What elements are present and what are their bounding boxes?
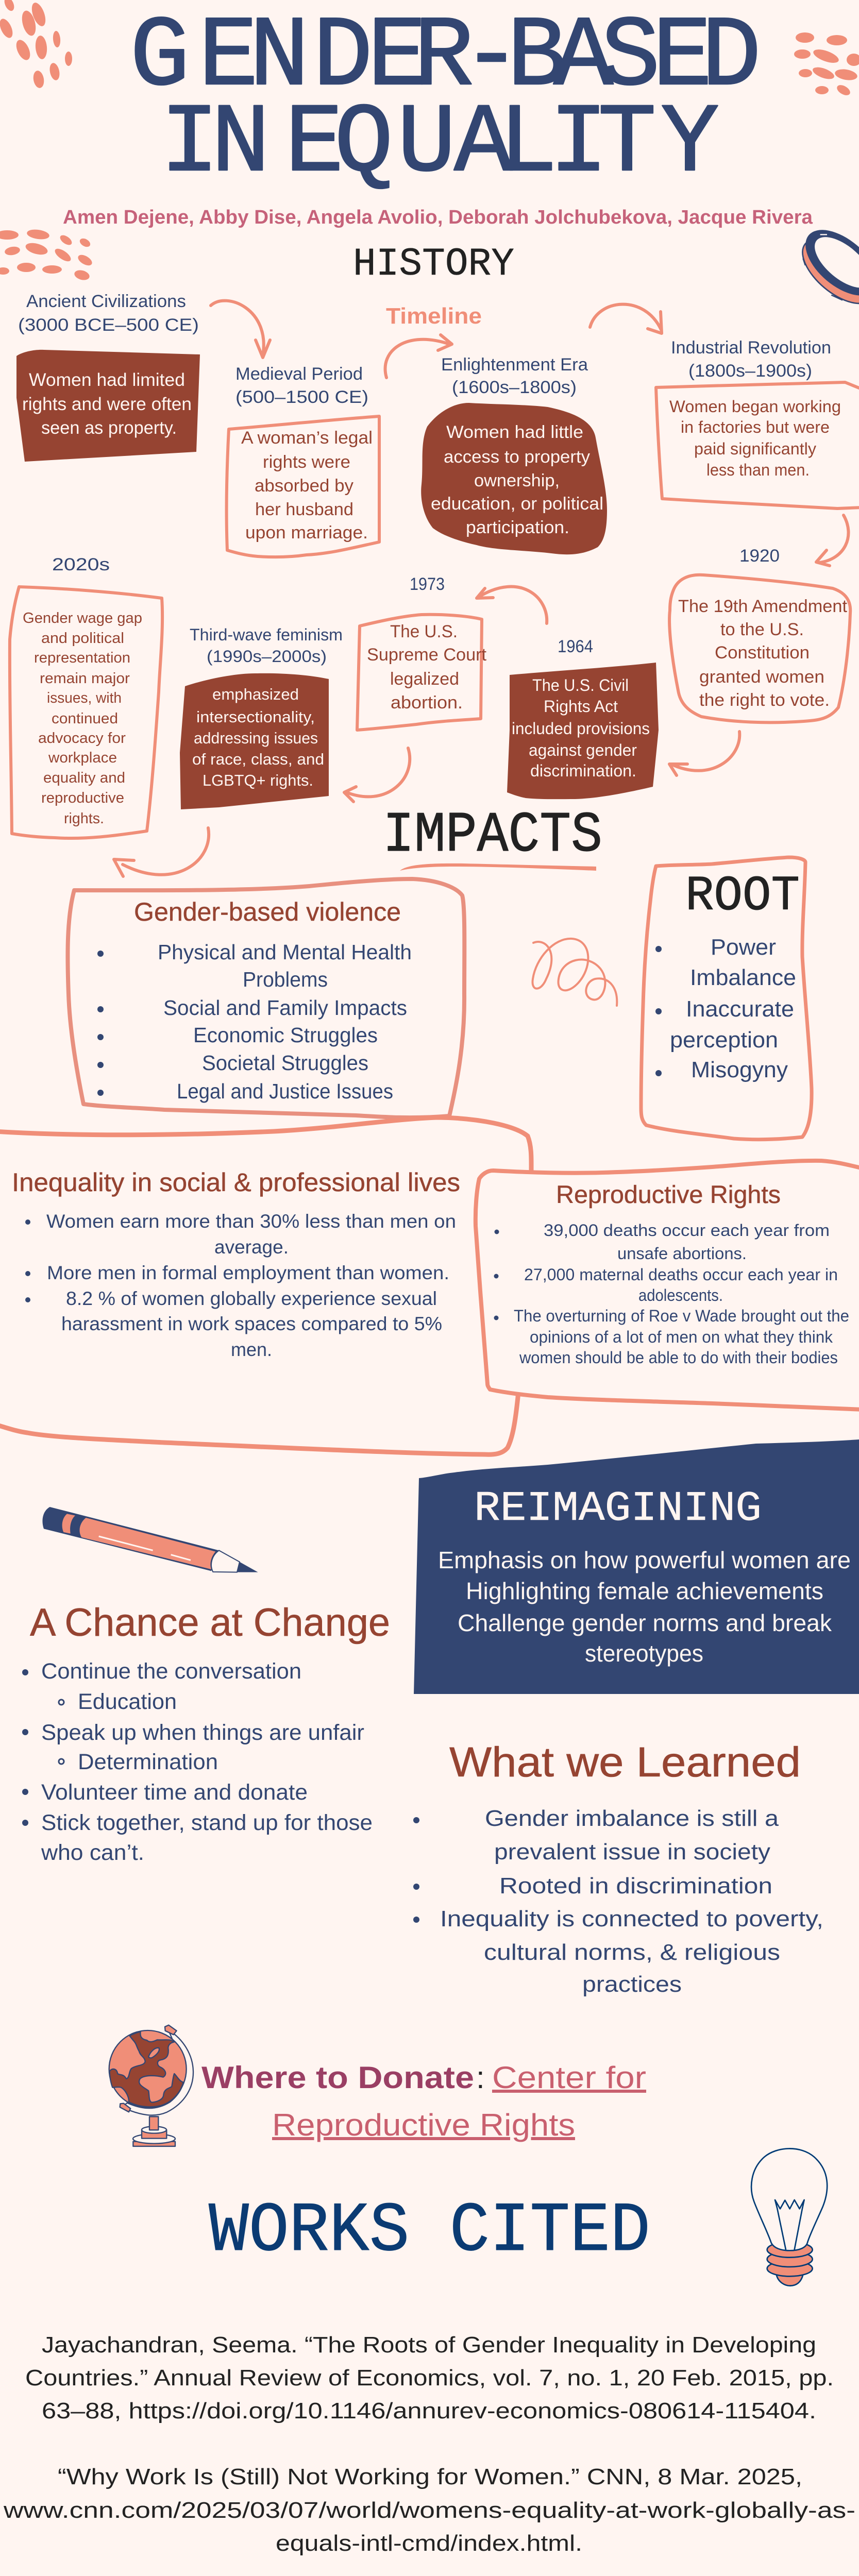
date label [441,355,588,397]
box text: included provisions [512,719,650,738]
bullet list: opinions of a lot of men on what they think [530,1328,833,1346]
box text [241,428,373,543]
box text: Women had little [446,422,583,442]
heading: impacts: IMPACTS [383,804,602,868]
decoration: mid left dabs [0,228,94,282]
box text: intersectionality, [196,708,315,726]
box text: Constitution [715,643,810,663]
bullet list: Education [78,1689,177,1714]
panel: a chance at change [22,1601,390,1865]
box text: emphasized [212,685,299,703]
donate callout: : [476,2060,485,2095]
panel: root [641,857,812,1140]
panel text: Highlighting female achievements [466,1578,823,1604]
bullet list: Misogyny [691,1057,788,1082]
box text: participation. [466,518,569,537]
arrow: 1973 to third-wave [344,748,410,802]
date label: 2020s [52,555,110,574]
panel: reimagining [414,1439,859,1694]
bullet list: Legal and Justice Issues [177,1079,393,1103]
box text: access to property [444,447,590,467]
bullet list: men. [231,1339,272,1360]
panel: what we learned [413,1739,823,1997]
bullet list: cultural norms, & religious [484,1940,780,1965]
box text: remain major [40,670,130,687]
timeline: 1920 [669,546,850,722]
decoration: squiggle [532,939,617,1006]
box text: Rights Act [544,697,618,716]
title [130,1,761,200]
outlined box [10,587,162,838]
date label: (1600s–1800s) [452,378,577,397]
panel heading: ROOT [685,868,800,924]
box text: seen as property. [41,418,177,438]
bullet list: who can’t. [41,1840,144,1865]
icon: pencil [42,1507,258,1572]
icon: ring [791,217,859,315]
works cited text: Countries.” Annual Review of Economics, vol. 7, no. 1, 20 Feb. 2015, pp. [25,2365,834,2391]
works cited text [3,2332,855,2556]
icon: light bulb [751,2148,827,2286]
bullet list: adolescents. [638,1286,723,1304]
outlined blob [669,575,850,722]
panel text: stereotypes [585,1640,703,1667]
box text: and political [41,630,124,647]
bullet list [413,1806,823,1997]
outlined box [227,416,379,557]
date label: Industrial Revolution [671,338,831,358]
donate callout: Center for [492,2060,646,2095]
date label: (1800s–1900s) [688,361,812,381]
bullet list: Continue the conversation [41,1659,301,1684]
box text: absorbed by [255,476,353,496]
box text: rights. [64,810,104,827]
bullet list: Determination [78,1750,218,1774]
bullet list: prevalent issue in society [494,1839,770,1865]
arrow: third-wave to 2020s [114,828,209,876]
box text: discrimination. [530,761,636,780]
outlined box [357,615,482,730]
timeline: medieval period [227,364,379,557]
bullet list: Power [711,935,776,960]
panel heading: A Chance at Change [30,1601,390,1645]
heading: works cited: WORKS CITED [209,2192,650,2271]
decoration: top right dabs [794,32,859,97]
box text: rights were [263,452,350,472]
box text: equality and [43,770,125,786]
box text: continued [52,710,118,727]
works cited text: equals-intl-cmd/index.html. [276,2531,582,2556]
timeline: enlightenment era [421,355,607,554]
bullet list: Volunteer time and donate [41,1780,308,1805]
box text: Women had limited [29,370,185,390]
box text [22,370,192,438]
date label: 1973 [410,574,445,594]
timeline: 1973 [357,574,487,730]
bullet list: Inequality is connected to poverty, [440,1906,823,1931]
box text: ownership, [474,471,560,490]
bullet list [97,940,412,1103]
date label: (1990s–2000s) [207,647,327,666]
panel text: Challenge gender norms and break [458,1609,832,1636]
timeline: third-wave feminism [180,625,343,809]
box text: of race, class, and [192,750,324,768]
works cited text: www.cnn.com/2025/03/07/world/womens-equality-at-work-globally-as- [3,2498,855,2523]
bullet list: harassment in work spaces compared to 5% [61,1313,442,1334]
bullet list: Problems [243,968,328,991]
bullet list: practices [582,1972,682,1997]
bullet list: 39,000 deaths occur each year from [544,1221,830,1240]
date label [671,338,831,381]
bullet list: Physical and Mental Health [158,940,412,964]
date label: Third-wave feminism [190,625,343,644]
box text: Women began working [669,397,841,416]
arrow: industrial to 1920 [816,515,848,566]
panel text [438,1547,851,1667]
heading: history: HISTORY [353,242,514,286]
box text: A woman’s legal [241,428,373,448]
bullet list: women should be able to do with their bodies [519,1348,838,1367]
bullet list: 8.2 % of women globally experience sexual [66,1288,437,1309]
box text [512,676,650,780]
box text [669,397,841,479]
bullet list [655,935,796,1082]
box text: paid significantly [694,439,816,458]
timeline: 1964 [507,637,659,799]
outlined box [656,382,859,509]
bullet list: average. [214,1236,289,1258]
bullet list: 27,000 maternal deaths occur each year in [524,1265,838,1284]
bullet list: perception [670,1027,778,1053]
bullet list: Speak up when things are unfair [41,1720,364,1745]
bullet list: Women earn more than 30% less than men on [46,1211,456,1232]
authors: Amen Dejene, Abby Dise, Angela Avolio, Deborah Jolchubekova, Jacque Rivera [63,207,813,228]
brown blob [421,403,607,554]
brown box [180,673,329,809]
date label [190,625,343,666]
date label: (500–1500 CE) [235,387,368,407]
decoration: top left dabs [0,0,72,89]
box text: granted women [699,667,824,687]
timeline: ancient civilizations [16,292,200,462]
panel heading: Reproductive Rights [556,1181,781,1209]
arrow: ancient to medieval [211,301,270,358]
box text: Gender wage gap [23,610,142,626]
timeline: industrial revolution [656,338,859,509]
donate callout: Reproductive Rights [272,2108,575,2142]
panel heading: REIMAGINING [474,1485,762,1533]
bullet list [25,1211,456,1360]
bullet list: Stick together, stand up for those [41,1810,373,1835]
date label: 1964 [558,637,593,656]
bullet list: Social and Family Impacts [163,996,407,1020]
arrow: enlightenment to industrial [590,304,662,333]
title: GENDER-BASED [130,1,761,114]
panel: gender-based violence [68,879,464,1117]
title: INEQUALITY [160,89,719,200]
box text: against gender [529,741,637,759]
donate callout [201,2060,646,2142]
box text [23,610,142,827]
bullet list: More men in formal employment than women. [47,1262,449,1283]
box text: issues, with [47,690,122,706]
panel heading: What we Learned [449,1739,801,1786]
date label: Enlightenment Era [441,355,588,375]
box text: The U.S. [390,622,458,641]
box text [678,597,848,710]
brown box [16,350,200,462]
panel: reproductive rights [476,1161,859,1410]
bullet list: Imbalance [690,965,796,990]
box text: rights and were often [22,394,192,414]
box text: legalized [390,669,459,689]
box text: less than men. [706,461,810,479]
box text: education, or political [431,494,603,514]
bullet list: Inaccurate [686,996,794,1022]
box text: addressing issues [194,729,318,747]
date label: Medieval Period [235,364,363,384]
date label: (3000 BCE–500 CE) [18,315,199,335]
panel text: Emphasis on how powerful women are [438,1547,851,1573]
box text: reproductive [41,790,124,806]
box text: the right to vote. [699,690,830,710]
panel: inequality in social and professional lives [0,1117,531,1454]
box text: advocacy for [38,730,126,747]
bullet list: Rooted in discrimination [499,1873,772,1899]
bullet list: Societal Struggles [202,1051,368,1075]
box text [192,685,324,789]
box text: to the U.S. [720,620,804,639]
panel heading: Gender-based violence [134,897,401,926]
date label: 1920 [739,546,780,566]
bullet list: Gender imbalance is still a [485,1806,779,1831]
bullet list [494,1221,849,1367]
date label [235,364,368,407]
works cited text: “Why Work Is (Still) Not Working for Women.” CNN, 8 Mar. 2025, [58,2464,802,2489]
box text [431,422,603,537]
box text: workplace [48,750,117,766]
date label [18,292,199,335]
box text: LGBTQ+ rights. [203,771,313,789]
bullet list: The overturning of Roe v Wade brought out the [514,1307,849,1325]
heading: timeline: Timeline [386,303,482,329]
box text: The 19th Amendment [678,597,848,616]
box text [367,622,487,713]
icon: globe [109,2025,193,2146]
box text: in factories but were [681,418,830,436]
arrow: 1964 to 1973 [477,587,547,623]
timeline: 2020s [10,555,162,838]
donate callout: Where to Donate [201,2060,474,2095]
bullet list [22,1659,373,1865]
box text: her husband [255,500,353,519]
arrow: 1920 to 1964 [669,732,739,775]
box text: abortion. [391,693,463,713]
panel heading: Inequality in social & professional lives [12,1168,460,1197]
bullet list: unsafe abortions. [617,1244,747,1263]
brown box [507,663,659,799]
date label: Ancient Civilizations [26,292,186,311]
bullet list: Economic Struggles [193,1023,378,1047]
box text: upon marriage. [245,523,368,543]
works cited text: Jayachandran, Seema. “The Roots of Gender Inequality in Developing [42,2332,816,2358]
box text: The U.S. Civil [532,676,629,694]
arrow: medieval to enlightenment [385,335,452,378]
box text: Supreme Court [367,645,487,665]
box text: representation [34,650,130,666]
works cited text: 63–88, https://doi.org/10.1146/annurev-economics-080614-115404. [42,2398,816,2424]
